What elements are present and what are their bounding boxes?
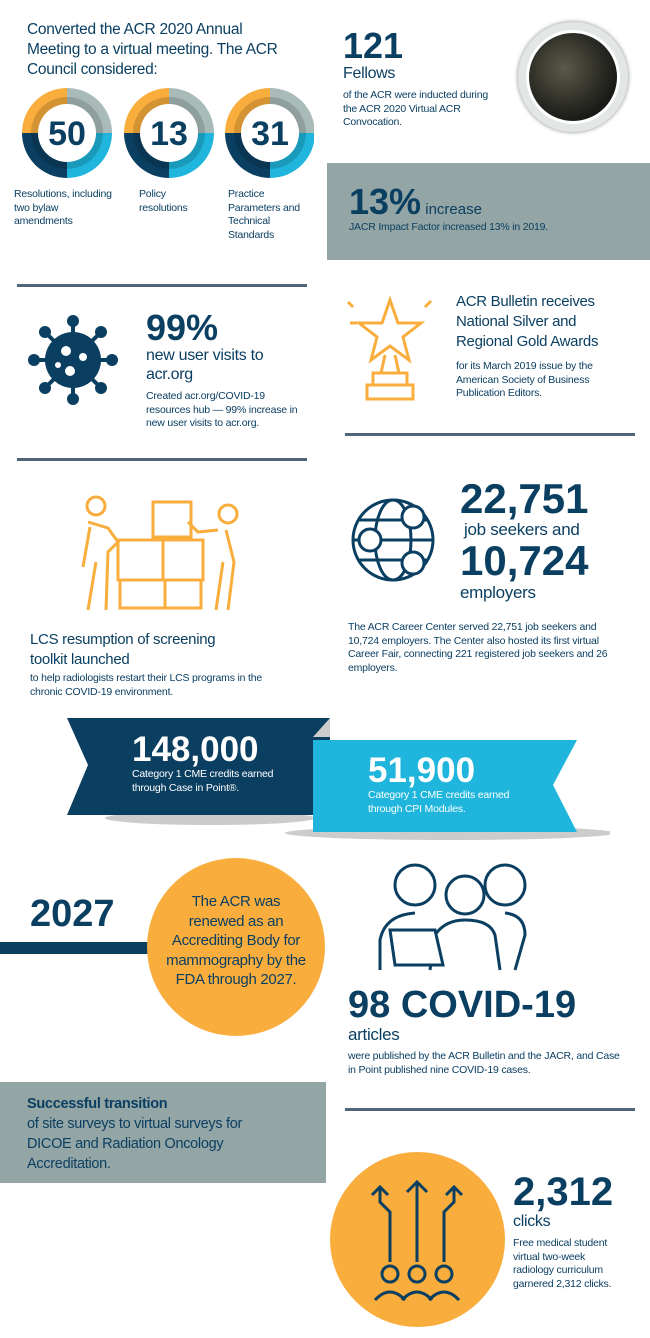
title: annual meeting: Converted the ACR 2020 Annual Meeting to a virtual meeting. The ACR Council considered: xyxy=(27,21,278,78)
stat: job seekers xyxy=(460,475,588,602)
donut charts: Policy resolutions xyxy=(139,188,188,214)
stat: job seekers: employers xyxy=(460,583,536,602)
panel: virtual surveys xyxy=(0,1082,326,1183)
stat: 2,312 clicks: Free medical student virtual two-week radiology curriculum garnered 2,312 clicks. xyxy=(513,1237,611,1290)
stat: 121 fellows: 121 xyxy=(343,25,403,66)
stat: 2027: 2027 xyxy=(30,893,115,935)
donut charts: 31 xyxy=(251,115,289,153)
stat: 2,312 clicks: clicks xyxy=(513,1213,550,1230)
panel: impact factor: 13% increase xyxy=(349,181,482,222)
orange circle: accrediting xyxy=(147,858,325,1036)
icon: virus xyxy=(28,315,118,405)
icon: puzzle people xyxy=(82,496,238,610)
stat: 98 COVID-19 articles xyxy=(348,984,620,1076)
ribbon text: 148,000: 148,000 xyxy=(132,730,259,769)
panel: impact factor xyxy=(327,163,650,260)
donut charts: 50 xyxy=(48,115,86,153)
text: bulletin awards xyxy=(456,293,598,399)
text: bulletin awards: for its March 2019 issue by the American Society of Business Publication Editors. xyxy=(456,360,593,399)
icon: people with laptop xyxy=(378,864,526,970)
icon: globe with people xyxy=(352,498,434,582)
ribbon text: 51,900: through CPI Modules. xyxy=(368,802,466,814)
stat: 99%: Created acr.org/COVID-19 resources hub — 99% increase in new user visits to acr.org. xyxy=(146,390,297,429)
stat: 2,312 clicks xyxy=(513,1170,613,1290)
stat: 121 fellows: Fellows xyxy=(343,65,395,82)
ribbon text: 51,900: Category 1 CME credits earned xyxy=(368,789,509,801)
orange circle icon: growth xyxy=(330,1152,505,1327)
orange circle: accrediting: The ACR was renewed as an Accrediting Body for mammography by the FDA through 2027. xyxy=(166,893,306,988)
stat: 121 fellows xyxy=(343,25,488,128)
stat: 99%: new user visits to acr.org xyxy=(146,347,263,383)
donut charts xyxy=(14,88,314,240)
ribbons xyxy=(67,718,610,840)
text: career center: The ACR Career Center served 22,751 job seekers and 10,724 employers. The Center also hosted its first virtual Career Fair, connecting 221 registered job seekers and 26 employers. xyxy=(348,621,607,674)
ribbon text: 51,900: 51,900 xyxy=(368,751,475,790)
text: LCS toolkit: LCS resumption of screening toolkit launched xyxy=(30,631,215,668)
stat: 98 COVID-19 articles: were published by the ACR Bulletin and the JACR, and Case in Point published nine COVID-19 cases. xyxy=(348,1050,620,1076)
panel: impact factor: JACR Impact Factor increased 13% in 2019. xyxy=(349,221,548,233)
stat: 99%: 99% xyxy=(146,307,218,348)
stat: 98 COVID-19 articles: 98 COVID-19 xyxy=(348,984,576,1026)
stat: job seekers: job seekers and xyxy=(464,520,580,539)
stat: 121 fellows: of the ACR were inducted during the ACR 2020 Virtual ACR Convocation. xyxy=(343,89,488,128)
donut charts: Resolutions, including two bylaw amendments xyxy=(14,188,112,227)
panel: virtual surveys: Successful transition xyxy=(27,1096,167,1112)
text: LCS toolkit xyxy=(30,631,262,698)
ribbon text: 148,000 xyxy=(132,730,273,794)
panel: virtual surveys: of site surveys to virtual surveys for DICOE and Radiation Oncology Accreditation. xyxy=(27,1116,242,1172)
stat: job seekers: 10,724 xyxy=(460,537,588,584)
text: bulletin awards: ACR Bulletin receives National Silver and Regional Gold Awards xyxy=(456,293,598,350)
stat: 2,312 clicks: 2,312 xyxy=(513,1170,613,1214)
stat: job seekers: 22,751 xyxy=(460,475,588,522)
stat: 99% xyxy=(146,307,297,429)
donut charts: 13 xyxy=(150,115,188,153)
ribbon text: 148,000: through Case in Point®. xyxy=(132,782,239,794)
text: LCS toolkit: to help radiologists restart their LCS programs in the chronic COVID-19 environment. xyxy=(30,672,262,698)
photo circle xyxy=(518,22,628,132)
ribbon text: 148,000: Category 1 CME credits earned xyxy=(132,768,273,780)
icon: award star xyxy=(347,296,432,400)
stat: 98 COVID-19 articles: articles xyxy=(348,1025,399,1044)
ribbon text: 51,900 xyxy=(368,751,509,814)
donut charts: Practice Parameters and Technical Standards xyxy=(228,188,300,240)
